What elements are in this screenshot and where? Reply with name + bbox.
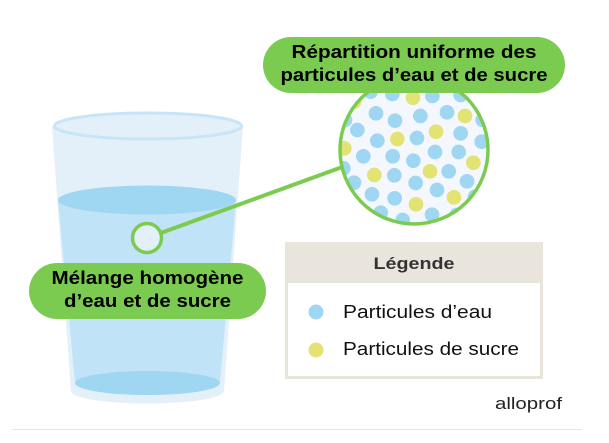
callout: homogeneous mixture: d’eau et de sucre: [64, 291, 231, 311]
connector line: [147, 166, 345, 238]
callout: homogeneous mixture: [29, 263, 266, 319]
legend: [285, 242, 543, 378]
legend item: water: [308, 302, 492, 322]
magnifying circle on the liquid: [132, 224, 162, 252]
logo: alloprof: alloprof: [495, 394, 562, 413]
legend header: [285, 242, 543, 283]
legend header: Légende: [374, 254, 454, 273]
callout: uniform distribution: [263, 37, 565, 93]
callout: homogeneous mixture: Mélange homogène: [52, 268, 244, 288]
legend item: water: Particules d’eau: [343, 302, 492, 322]
callout: uniform distribution: Répartition uniforme des: [292, 42, 536, 62]
glass of homogeneous mixture: [52, 113, 243, 404]
magnified particles circle: [338, 93, 490, 226]
callout: uniform distribution: particules d’eau et de sucre: [280, 65, 548, 85]
legend item: sugar: Particules de sucre: [343, 339, 519, 359]
